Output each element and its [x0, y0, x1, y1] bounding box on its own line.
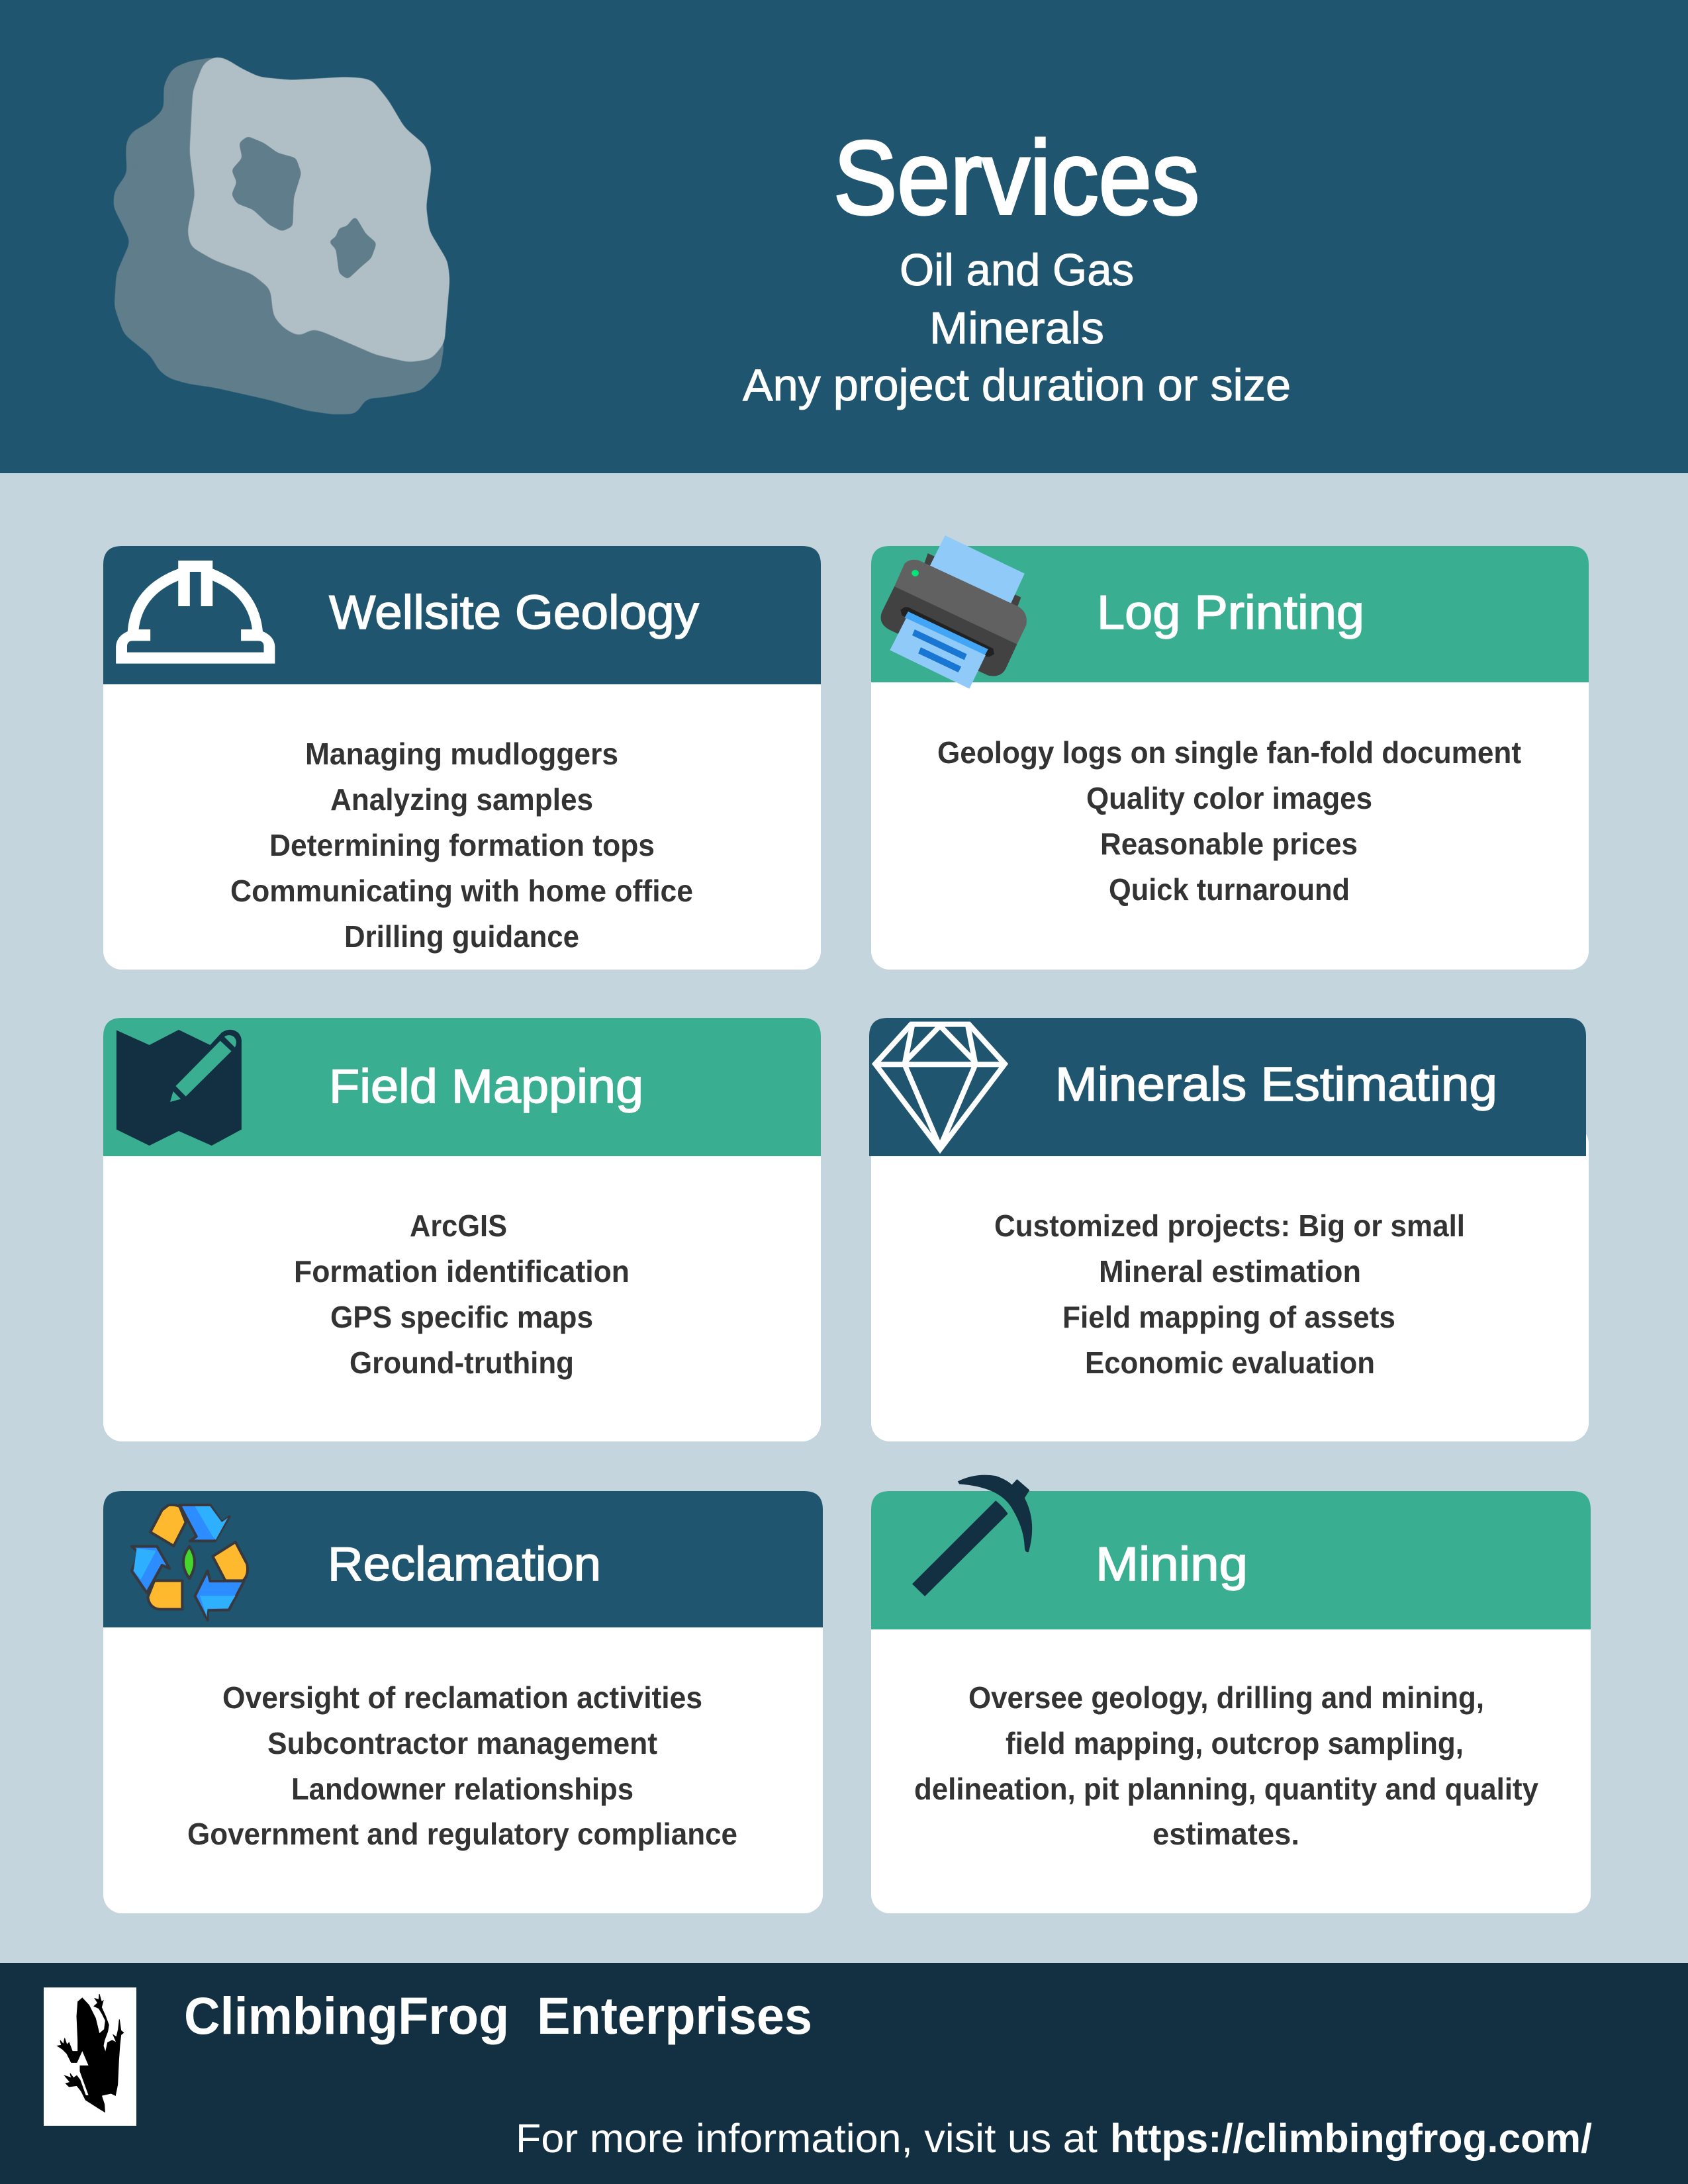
panel: log printing [871, 535, 1589, 970]
service list: GPS specific maps [330, 1300, 593, 1334]
service list: Mineral estimation [1099, 1254, 1361, 1289]
service list: Reasonable prices [1100, 827, 1358, 861]
service list: Determining formation tops [269, 828, 655, 862]
website call to action: For more information, visit us at [516, 2116, 1098, 2161]
icon: rock [113, 56, 450, 415]
logo: frog [44, 1987, 136, 2126]
service description: delineation, pit planning, quantity and quality [914, 1772, 1538, 1806]
service list: Government and regulatory compliance [187, 1817, 737, 1851]
website call to action: https://climbingfrog.com/ [1110, 2116, 1592, 2161]
header band [0, 0, 1688, 473]
panel: mining [871, 1475, 1591, 1913]
panel: reclamation [103, 1491, 823, 1913]
service list: Subcontractor management [267, 1726, 657, 1760]
heading: Mining [1096, 1538, 1248, 1591]
title: Services [833, 120, 1199, 236]
service description: Oversee geology, drilling and mining, [968, 1680, 1484, 1715]
service list [994, 1208, 1465, 1380]
panel: field mapping [103, 1018, 821, 1441]
service list: Economic evaluation [1085, 1345, 1375, 1380]
service description [914, 1680, 1538, 1851]
subtitle: oil and gas: Oil and Gas [900, 245, 1134, 295]
service list [230, 737, 693, 954]
panel: wellsite geology [103, 546, 821, 970]
service list: Communicating with home office [230, 874, 693, 908]
heading: Reclamation [328, 1538, 601, 1591]
subtitle: minerals: Minerals [929, 303, 1104, 353]
panel: minerals estimating [869, 1018, 1589, 1441]
heading: Field Mapping [329, 1060, 643, 1113]
icon: printer [881, 535, 1027, 689]
heading: Wellsite Geology [329, 586, 699, 639]
service list: Quick turnaround [1109, 872, 1350, 907]
heading: Log Printing [1097, 586, 1364, 639]
service list: Geology logs on single fan-fold document [937, 735, 1521, 770]
service list: Landowner relationships [291, 1772, 633, 1806]
service list: Managing mudloggers [305, 737, 618, 771]
footer band [0, 1963, 1688, 2184]
service list: Formation identification [294, 1254, 630, 1289]
icon: recycle [132, 1505, 248, 1620]
service list: Ground-truthing [350, 1345, 574, 1380]
icon: pickaxe [912, 1475, 1032, 1596]
service list: Drilling guidance [344, 919, 579, 954]
service list: Quality color images [1086, 781, 1372, 815]
service list [937, 735, 1521, 907]
icon: hard hat [116, 561, 275, 664]
icon: diamond [875, 1024, 1005, 1150]
website call to action [516, 2116, 1592, 2161]
service list: ArcGIS [410, 1208, 507, 1243]
service list: Analyzing samples [330, 782, 593, 817]
service list: Field mapping of assets [1062, 1300, 1395, 1334]
heading: Minerals Estimating [1055, 1058, 1497, 1111]
service list: Customized projects: Big or small [994, 1208, 1465, 1243]
service list: Oversight of reclamation activities [222, 1680, 702, 1715]
service description: field mapping, outcrop sampling, [1006, 1726, 1464, 1760]
service list [294, 1208, 630, 1380]
icon: map and pencil [117, 1030, 242, 1146]
subtitle: project size: Any project duration or size [743, 360, 1291, 410]
service description: estimates. [1152, 1817, 1299, 1851]
company name: ClimbingFrog Enterprises [184, 1986, 812, 2045]
service list [187, 1680, 737, 1851]
